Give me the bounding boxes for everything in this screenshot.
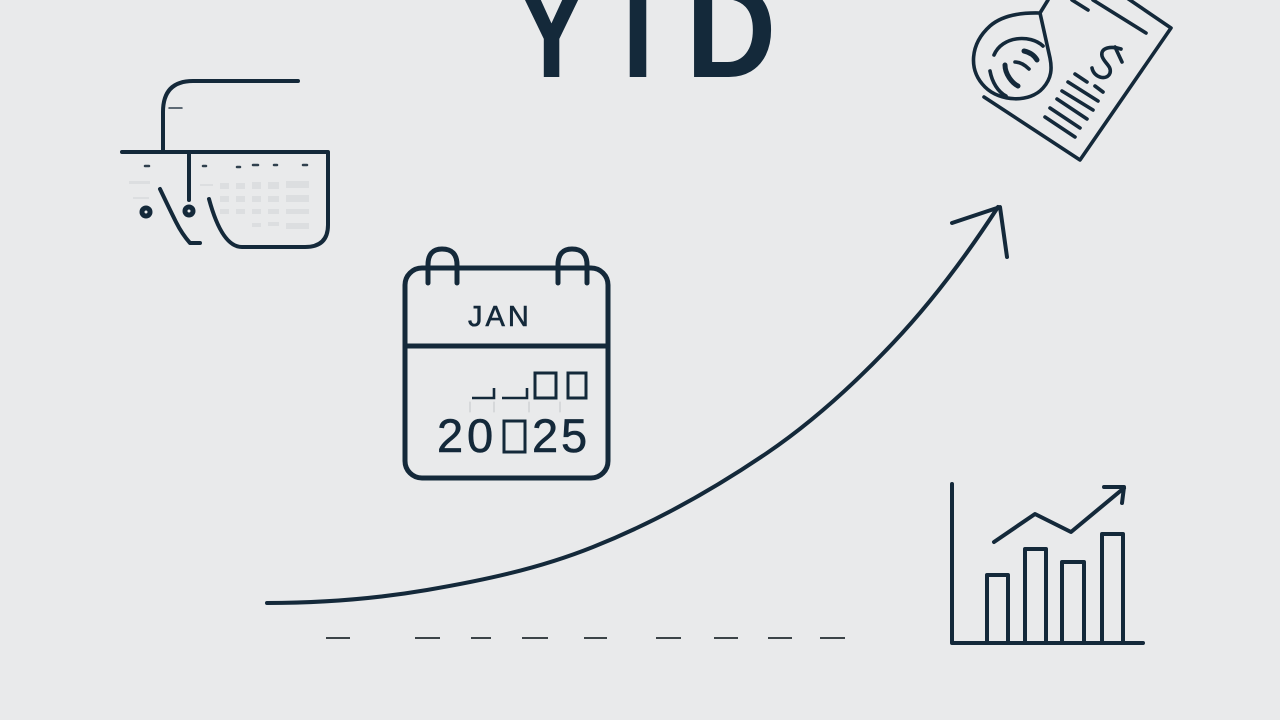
binder rings bbox=[428, 249, 587, 283]
bars bbox=[987, 534, 1123, 643]
handle and frame bbox=[122, 81, 328, 247]
faint ticks bbox=[470, 402, 560, 412]
dashed baseline bbox=[326, 637, 845, 639]
title bbox=[515, 0, 776, 106]
glitch glyphs bbox=[472, 388, 527, 398]
coin bulb bbox=[974, 0, 1051, 99]
calendar frame bbox=[405, 268, 608, 478]
text lines bbox=[1045, 74, 1103, 137]
faint spreadsheet cells bbox=[129, 181, 309, 229]
icon: spreadsheet basket bbox=[122, 81, 328, 247]
squiggle bbox=[160, 189, 200, 243]
icon: calendar bbox=[405, 249, 608, 478]
small rings bbox=[142, 208, 150, 216]
document outline bbox=[984, 0, 1171, 160]
icon: bar chart bbox=[952, 484, 1143, 643]
drop line bbox=[187, 152, 191, 200]
trend line bbox=[994, 488, 1124, 542]
missing glyph box bbox=[504, 421, 525, 452]
header divider bbox=[405, 344, 608, 348]
axes bbox=[952, 484, 1143, 643]
month label: JAN bbox=[468, 301, 532, 333]
document top lines bbox=[1072, 0, 1146, 33]
trend arrowhead bbox=[1104, 487, 1124, 503]
icon: document with coin bbox=[974, 0, 1171, 160]
faint dash marks bbox=[145, 108, 307, 167]
coin inner arcs bbox=[990, 39, 1043, 96]
dollar sign bbox=[1092, 47, 1122, 78]
year label: 2025 bbox=[437, 409, 587, 462]
growth arrow bbox=[267, 207, 1007, 603]
growth curve bbox=[267, 207, 998, 603]
arrowhead bbox=[952, 207, 1007, 257]
